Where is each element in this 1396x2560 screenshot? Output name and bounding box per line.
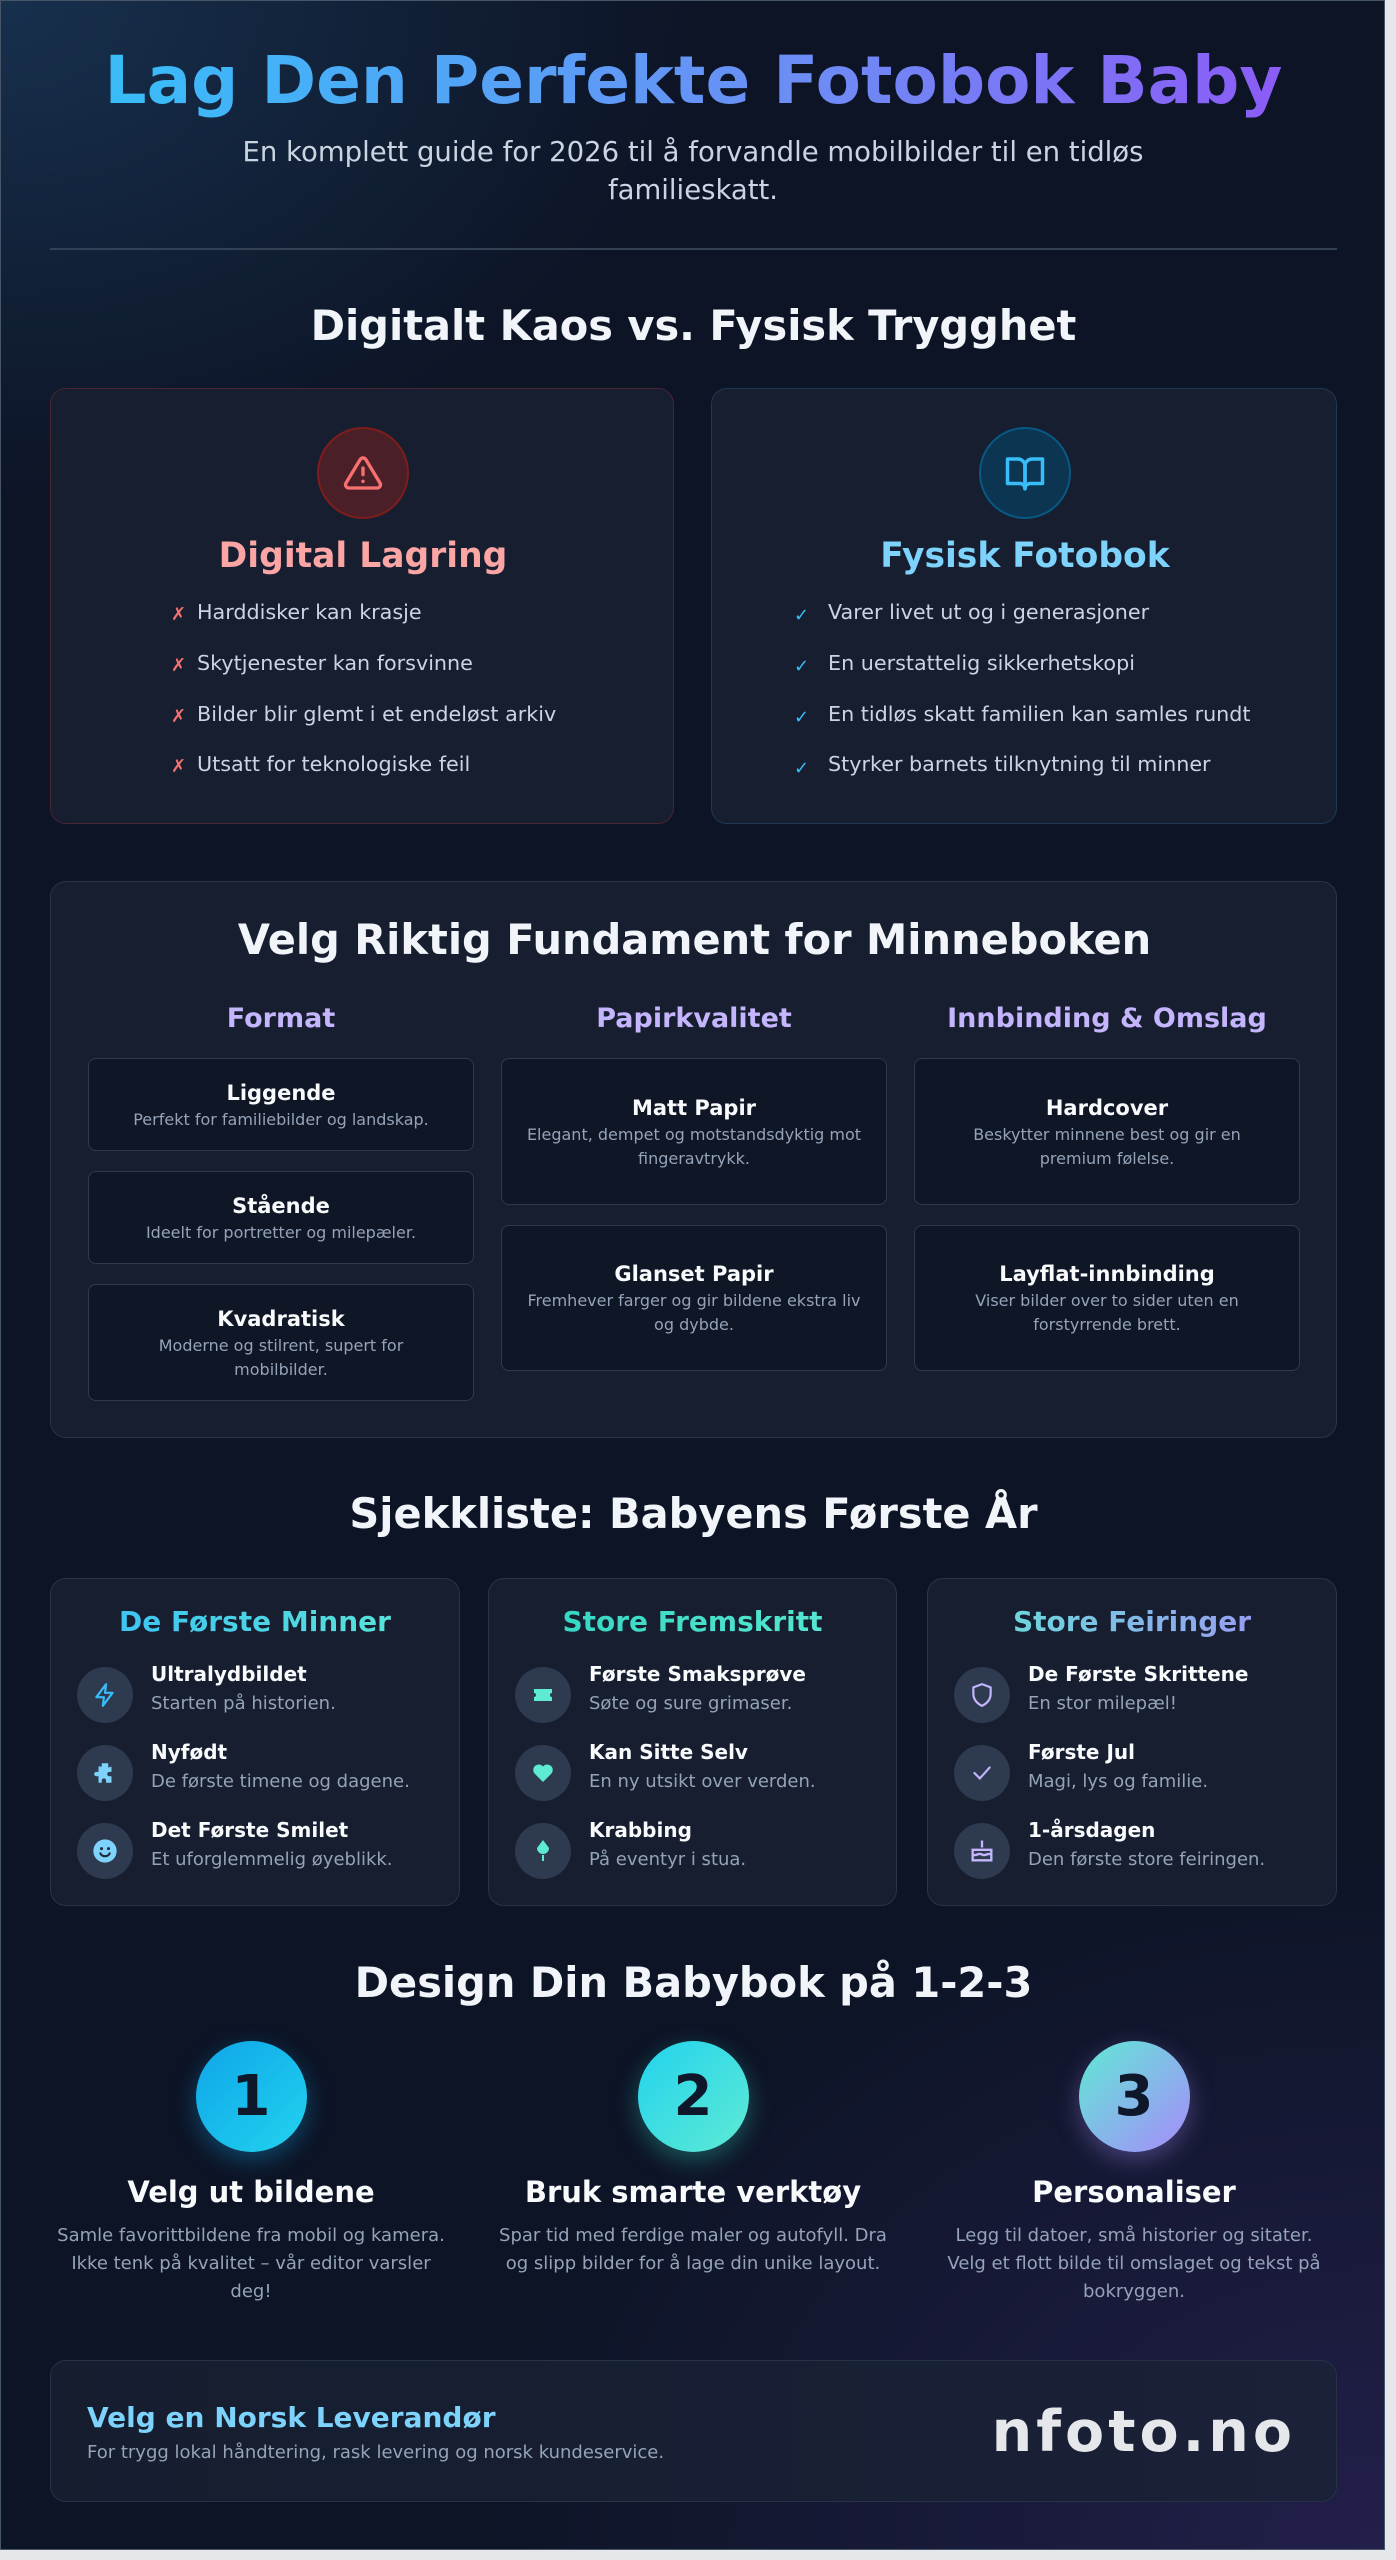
box: Matt Papir: Elegant, dempet og motstandsdyktig mot fingeravtrykk. (527, 1124, 861, 1168)
box: Matt Papir (501, 1058, 887, 1205)
list: negatives: Harddisker kan krasje (197, 600, 422, 624)
title: Lag Den Perfekte Fotobok Baby (105, 42, 1282, 119)
item: Nyfødt: Nyfødt (151, 1740, 227, 1764)
item: 1-årsdagen (954, 1818, 1265, 1879)
brand: nfoto.no: nfoto.no (992, 2399, 1296, 2465)
panel: Store Fremskritt: Store Fremskritt (562, 1605, 823, 1638)
item: Krabbing: På eventyr i stua. (589, 1849, 746, 1870)
list: positives: Varer livet ut og i generasjoner (828, 600, 1149, 624)
item: Kan Sitte Selv: En ny utsikt over verden. (589, 1771, 816, 1792)
column: Innbinding (914, 1003, 1300, 1371)
step 2: Bruk smarte verktøy (525, 2175, 861, 2209)
heading: Digital Lagring: Digital Lagring (219, 536, 507, 576)
list: negatives: Bilder blir glemt i et endeløst arkiv (197, 702, 556, 726)
heading: Digitalt Kaos vs. Fysisk Trygghet: Digitalt Kaos vs. Fysisk Trygghet (311, 301, 1076, 350)
item: Nyfødt (77, 1740, 410, 1801)
item: Kan Sitte Selv (515, 1740, 816, 1801)
item: Krabbing: Krabbing (589, 1818, 692, 1842)
box: Glanset Papir (501, 1225, 887, 1371)
heading: Velg Riktig Fundament: Velg Riktig Fundament for Minneboken (238, 915, 1151, 964)
box: Glanset Papir: Glanset Papir (614, 1262, 774, 1286)
panel: Store Feiringer: Store Feiringer (1013, 1605, 1251, 1638)
item: Ultralydbildet (77, 1662, 336, 1723)
box: Hardcover: Hardcover (1046, 1096, 1168, 1120)
step 1 (57, 2037, 445, 2302)
step 2: Spar tid med ferdige maler og autofyll. Dra og slipp bilder for å lage din unike layout. (499, 2225, 887, 2274)
panel: fysisk fotobok (711, 388, 1337, 824)
list: negatives: ✗ (171, 706, 186, 727)
box: Stående: Stående (232, 1194, 330, 1218)
box: Hardcover: Beskytter minnene best og gir en premium følelse. (973, 1124, 1241, 1168)
box: Matt Papir: Matt Papir (632, 1096, 756, 1120)
step 1: Velg ut bildene (127, 2175, 375, 2209)
column: Innbinding: Innbinding & Omslag (947, 1003, 1267, 1034)
list: positives: Styrker barnets tilknytning til minner (828, 752, 1211, 776)
box: Hardcover (914, 1058, 1300, 1205)
column: Papirkvalitet: Papirkvalitet (596, 1003, 792, 1034)
step 2: 2 (674, 2064, 712, 2129)
panel: De Første Minner: De Første Minner (119, 1605, 391, 1638)
box: Kvadratisk: Moderne og stilrent, supert for mobilbilder. (159, 1336, 403, 1378)
icon: book (979, 427, 1071, 519)
item: De Første Skrittene (954, 1662, 1248, 1723)
list: negatives (171, 600, 556, 777)
item: Første Smaksprøve (515, 1662, 806, 1723)
list: negatives: ✗ (171, 655, 186, 676)
box: Liggende: Perfekt for familiebilder og landskap. (133, 1110, 429, 1128)
item: Krabbing (515, 1818, 746, 1879)
item: De Første Skrittene: De Første Skrittene (1028, 1662, 1248, 1686)
panel: digital lagring (50, 388, 674, 824)
box: Layflat (914, 1225, 1300, 1371)
panel: fundament (50, 881, 1337, 1438)
list: positives: ✓ (794, 656, 809, 677)
item: Første Smaksprøve: Første Smaksprøve (589, 1662, 806, 1686)
box: Kvadratisk (88, 1284, 474, 1401)
panel: De Første Minner (50, 1578, 460, 1906)
step 3: Personaliser (1032, 2175, 1236, 2209)
item: 1-årsdagen: 1-årsdagen (1028, 1818, 1155, 1842)
list: negatives: Skytjenester kan forsvinne (197, 651, 473, 675)
step 3: 3 (1115, 2064, 1153, 2129)
box: Liggende (88, 1058, 474, 1151)
list: negatives: ✗ (171, 756, 186, 777)
item: Første Smaksprøve: Søte og sure grimaser. (589, 1693, 792, 1714)
step 1: 1 (232, 2064, 270, 2129)
box: Stående (88, 1171, 474, 1264)
list: positives: ✓ (794, 758, 809, 779)
box: Stående: Ideelt for portretter og milepæler. (146, 1222, 416, 1242)
item: Kan Sitte Selv: Kan Sitte Selv (589, 1740, 748, 1764)
box: Kvadratisk: Kvadratisk (217, 1306, 345, 1330)
box: Layflat: Layflat-innbinding (999, 1262, 1215, 1286)
step 3 (947, 2036, 1321, 2302)
item: Det Første Smilet (77, 1818, 393, 1879)
step 1: Samle favorittbildene fra mobil og kamera. Ikke tenk på kvalitet – vår editor varsler deg! (57, 2225, 445, 2302)
item: Det Første Smilet: Det Første Smilet (151, 1818, 348, 1842)
heading: Fysisk Fotobok: Fysisk Fotobok (880, 536, 1170, 576)
item: Første Jul: Magi, lys og familie. (1028, 1771, 1208, 1792)
item: 1-årsdagen: Den første store feiringen. (1028, 1849, 1265, 1870)
item: Ultralydbildet: Ultralydbildet (151, 1662, 307, 1686)
box: Glanset Papir: Fremhever farger og gir bildene ekstra liv og dybde. (527, 1291, 860, 1334)
column: Papirkvalitet (501, 1003, 887, 1371)
item: De Første Skrittene: En stor milepæl! (1028, 1693, 1177, 1714)
heading: Sjekkliste: Sjekkliste: Babyens Første År (349, 1489, 1038, 1538)
list: positives: ✓ (794, 605, 809, 626)
icon: warning (317, 427, 409, 519)
item: Ultralydbildet: Starten på historien. (151, 1693, 336, 1714)
list: positives (794, 600, 1251, 779)
box: Liggende: Liggende (226, 1080, 336, 1104)
list: positives: En uerstattelig sikkerhetskopi (828, 651, 1135, 675)
item: Første Jul (954, 1740, 1208, 1801)
subtitle: En komplett guide for 2026 til å forvandle mobilbilder til en tidløs familieskatt. (243, 136, 1143, 206)
panel: Store Feiringer (927, 1578, 1337, 1906)
item: Nyfødt: De første timene og dagene. (151, 1771, 410, 1792)
heading: Design Din Babybok: Design Din Babybok på 1-2-3 (355, 1958, 1032, 2007)
list: positives: En tidløs skatt familien kan samles rundt (828, 702, 1251, 726)
footer text: For trygg lokal håndtering, rask levering og norsk kundeservice. (87, 2442, 664, 2463)
column: Format (88, 1003, 474, 1401)
panel: Store Fremskritt (488, 1578, 897, 1906)
list: negatives: ✗ (171, 604, 186, 625)
item: Første Jul: Første Jul (1028, 1740, 1135, 1764)
panel: footer leverandør (50, 2360, 1337, 2502)
column: Format: Format (227, 1003, 335, 1034)
box: Layflat: Viser bilder over to sider uten en forstyrrende brett. (975, 1291, 1239, 1334)
step 2 (499, 2037, 887, 2274)
list: positives: ✓ (794, 707, 809, 728)
footer heading: Velg en Norsk Leverandør (87, 2401, 496, 2434)
item: Det Første Smilet: Et uforglemmelig øyeblikk. (151, 1849, 393, 1870)
list: negatives: Utsatt for teknologiske feil (197, 752, 470, 776)
step 3: Legg til datoer, små historier og sitater. Velg et flott bilde til omslaget og tekst på bokryggen. (947, 2225, 1321, 2302)
